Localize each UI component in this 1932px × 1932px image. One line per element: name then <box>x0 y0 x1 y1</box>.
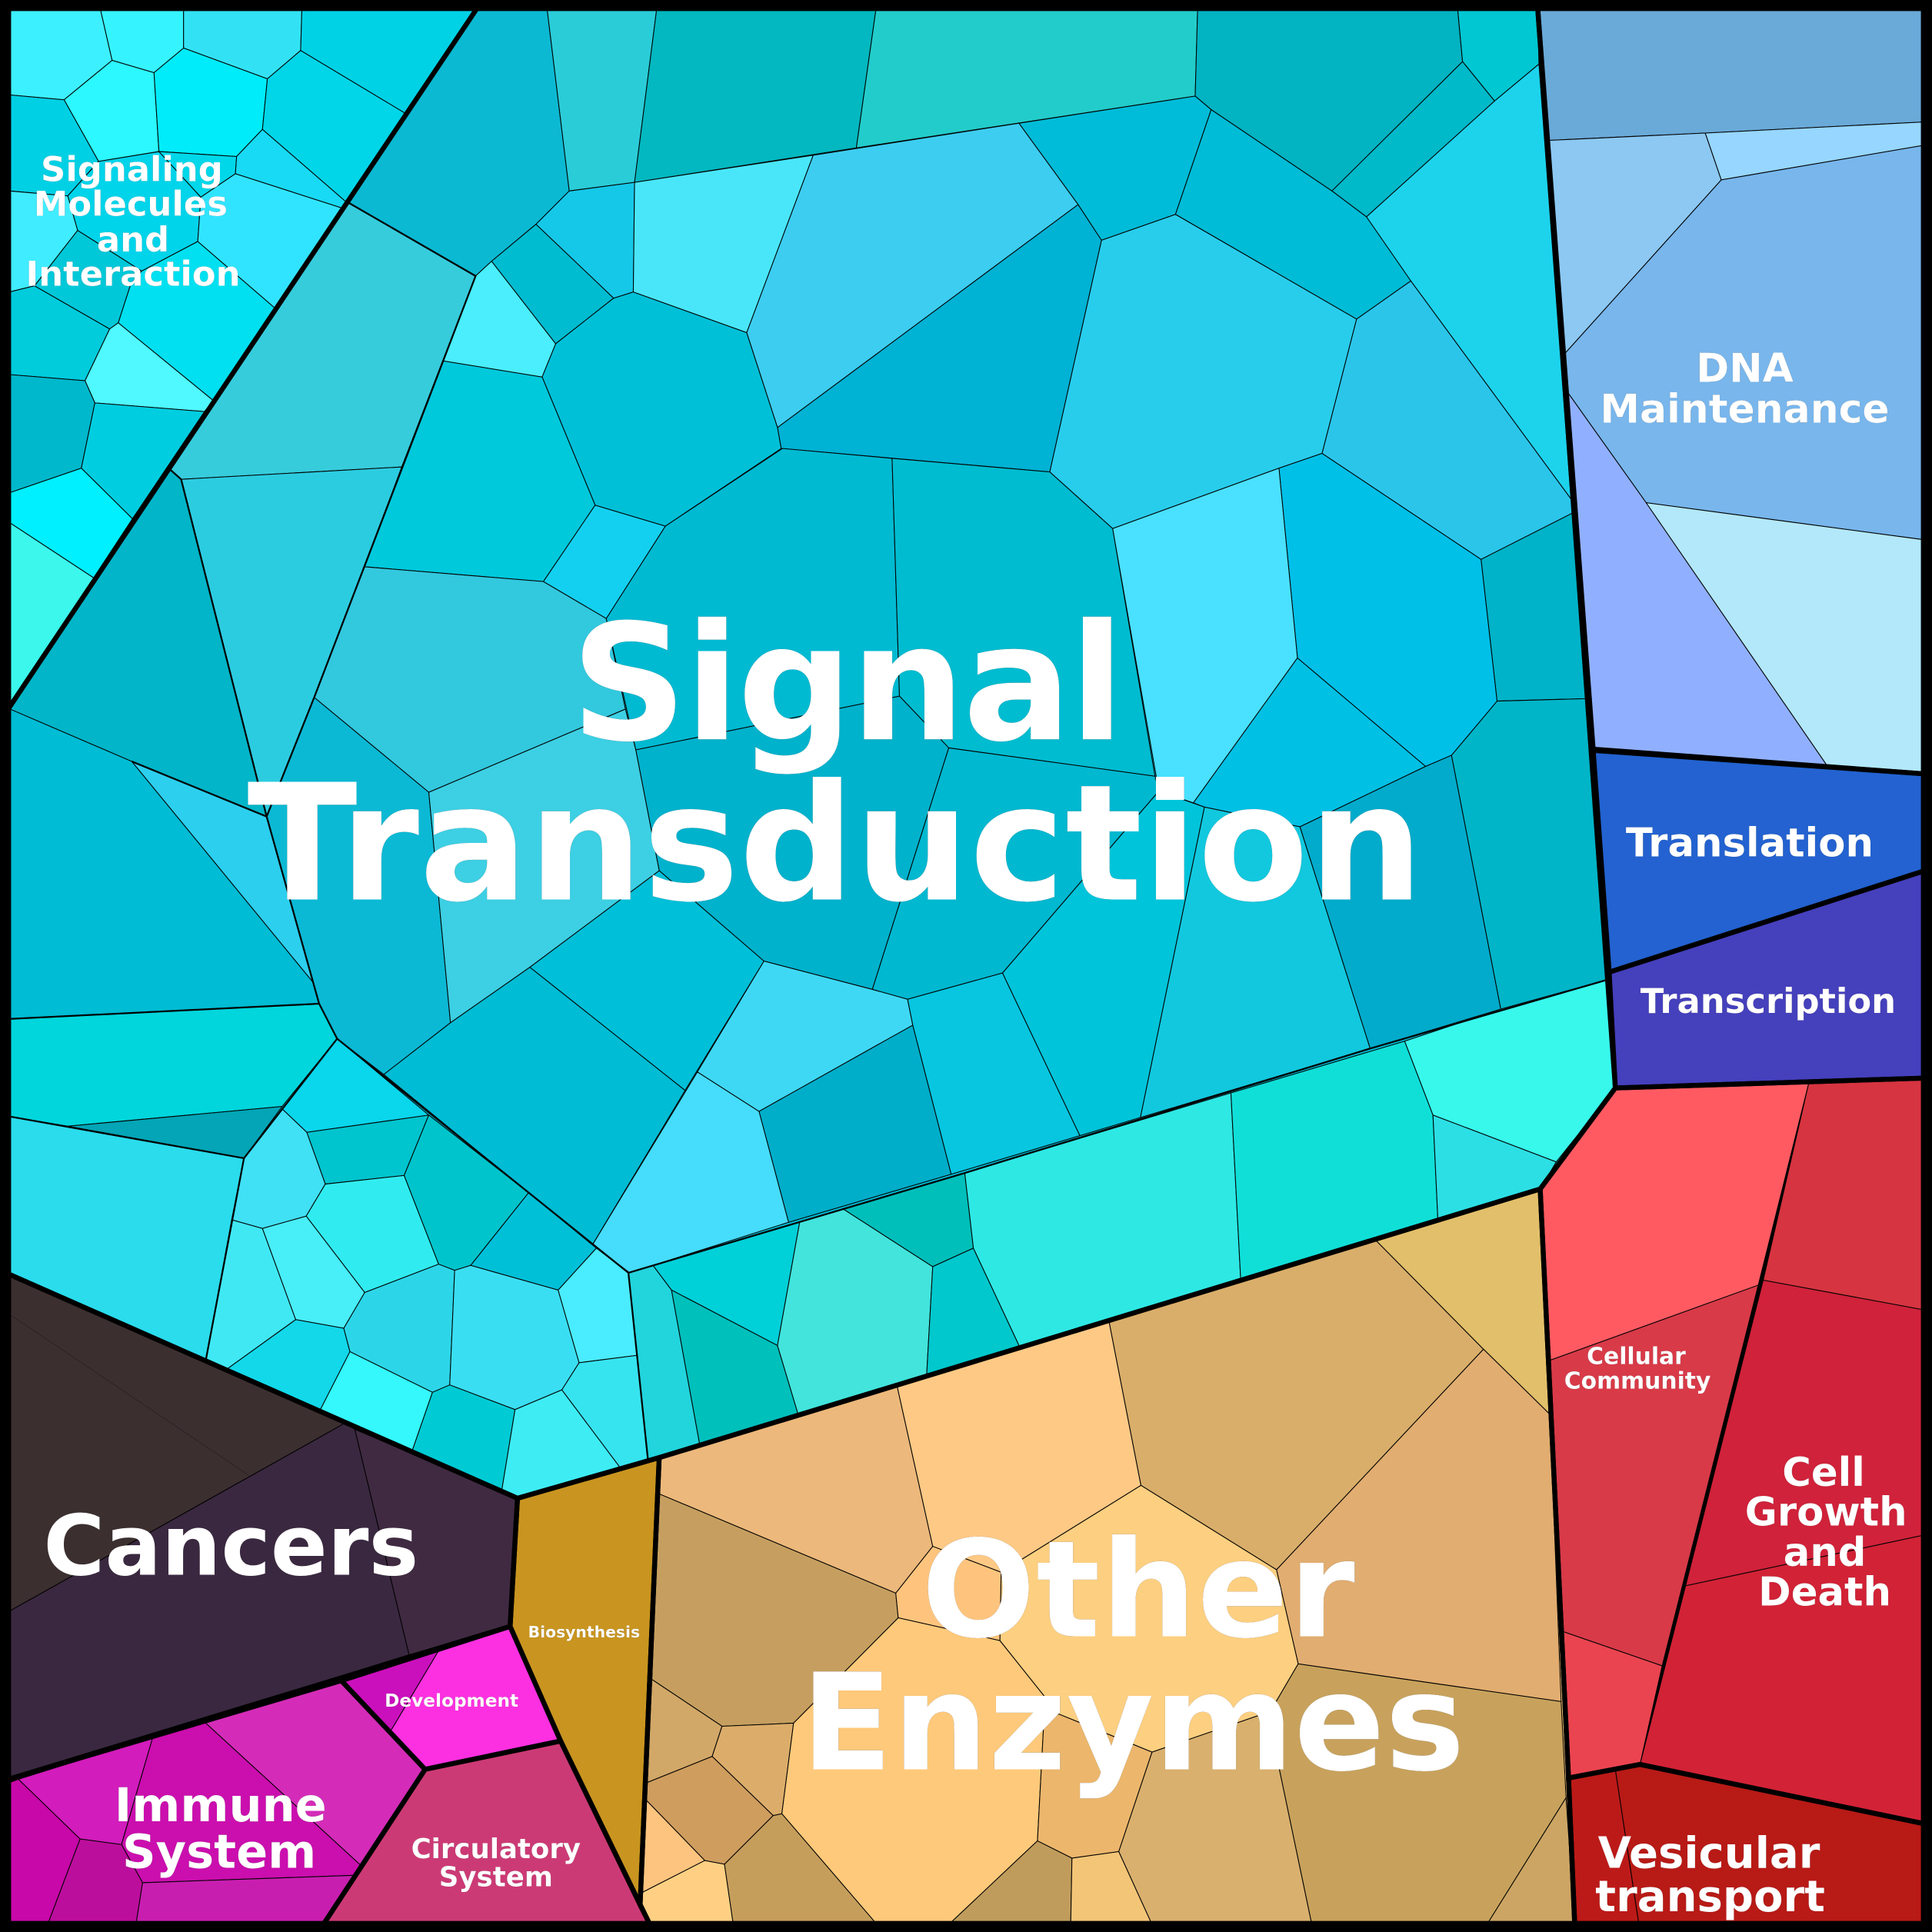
label: Other Enzymes: Enzymes <box>801 1646 1465 1802</box>
panel: DNA Maintenance <box>1537 8 1924 774</box>
label: Cellular Community: Community <box>1564 1368 1710 1395</box>
label: Cellular Community: Cellular <box>1587 1343 1686 1370</box>
label: DNA Maintenance: DNA <box>1696 346 1794 392</box>
label: Vesicular transport: Vesicular <box>1598 1829 1820 1879</box>
cells: signal transduction <box>8 8 1615 1498</box>
label: Biosynthesis: Biosynthesis <box>528 1623 640 1641</box>
label: Cell Growth and Death: Death <box>1758 1569 1891 1615</box>
label: Signaling Molecules and Interaction: Molecules <box>34 183 228 224</box>
panel: Translation <box>1593 751 1924 972</box>
label: Cell Growth and Death: and <box>1784 1530 1867 1576</box>
cells: cancers <box>8 1274 518 1779</box>
panel: Development <box>341 1627 561 1770</box>
panel: Biosynthesis <box>510 1457 659 1905</box>
cells: DNA maintenance <box>1537 8 1924 774</box>
cells: vesicular transport <box>1568 1764 1924 1924</box>
cells: other enzymes <box>640 1189 1574 1924</box>
cells: immune system <box>8 1681 425 1924</box>
panel: Immune System <box>8 1681 425 1924</box>
label: Signaling Molecules and Interaction: Signaling <box>41 149 223 190</box>
panel: Other Enzymes <box>640 1189 1574 1924</box>
label: DNA Maintenance: Maintenance <box>1600 387 1890 433</box>
label: Development: Development <box>385 1690 518 1711</box>
panel: Circulatory System <box>324 1741 649 1924</box>
label: Cell Growth and Death: Growth <box>1745 1489 1907 1535</box>
label: Signal Transduction: Transduction <box>247 750 1424 938</box>
label: Immune System: Immune <box>115 1779 327 1833</box>
panel: Transcription <box>1609 871 1924 1088</box>
label: Cancers: Cancers <box>43 1497 418 1594</box>
label: Vesicular transport: transport <box>1595 1872 1825 1922</box>
label: Other Enzymes: Other <box>921 1513 1356 1669</box>
panel: Signaling Molecules and Interaction <box>9 9 477 704</box>
label: Signal Transduction: Signal <box>571 590 1122 778</box>
label: Transcription: Transcription <box>1641 981 1896 1021</box>
cells: signaling molecules <box>9 9 477 704</box>
panel: Vesicular transport <box>1568 1764 1924 1924</box>
label: Cell Growth and Death: Cell <box>1782 1450 1865 1496</box>
cells: cell growth <box>1541 1078 1924 1824</box>
label: Circulatory System: System <box>439 1862 553 1894</box>
cells: development <box>341 1627 561 1770</box>
label: Signaling Molecules and Interaction: Interaction <box>26 254 241 295</box>
panel: Cell Growth and Death <box>1541 1078 1924 1824</box>
label: Immune System: System <box>122 1826 316 1880</box>
label: Circulatory System: Circulatory <box>411 1834 581 1865</box>
label: Signaling Molecules and Interaction: and <box>97 219 169 260</box>
panel: Cancers <box>8 1274 518 1779</box>
panel: Signal Transduction <box>8 8 1615 1498</box>
label: Translation: Translation <box>1626 820 1874 866</box>
